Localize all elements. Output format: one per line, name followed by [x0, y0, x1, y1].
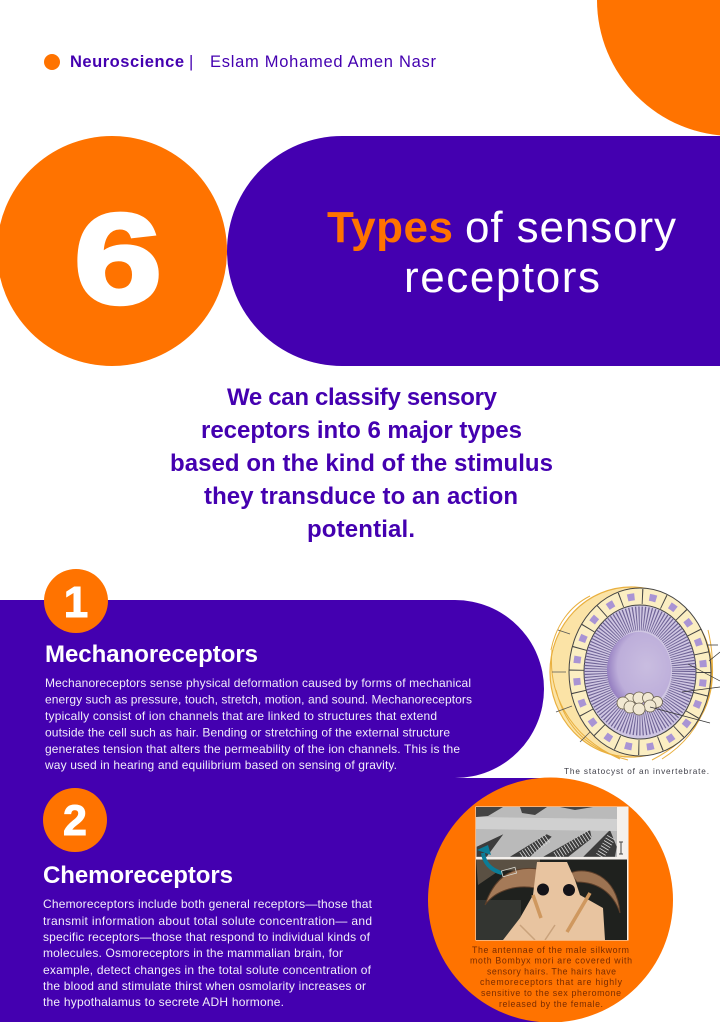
text block: mechanoreceptors description: typically consist of ion channels that are linked to structures that extend	[45, 709, 437, 723]
title banner: Types	[327, 203, 453, 252]
body	[503, 862, 605, 940]
caption: silkworm: moth Bombyx mori are covered with	[470, 956, 632, 966]
number badge 2: 2	[63, 797, 87, 845]
text block: mechanoreceptors description: Mechanoreceptors sense physical deformation caused by forms of mechanical	[45, 676, 471, 690]
header line: Neuroscience	[70, 53, 184, 71]
image: statocyst diagram	[550, 587, 720, 760]
title banner: receptors	[404, 253, 600, 302]
title banner: of sensory	[465, 203, 676, 252]
text block: chemoreceptors description: the hypothalamus to secrete ADH hormone.	[43, 995, 284, 1009]
caption: silkworm: The antennae of the male silkworm	[472, 945, 629, 955]
intro statement	[170, 384, 553, 543]
caption: silkworm: chemoreceptors that are highly	[480, 977, 623, 987]
panel: chemoreceptors text	[43, 862, 373, 1009]
text block: chemoreceptors description: Chemoreceptors include both general receptors—those that	[43, 897, 373, 911]
text block: mechanoreceptors description	[44, 676, 472, 772]
decorative corner circle	[597, 0, 720, 136]
number badge 2	[43, 788, 107, 852]
caption: statocyst: The statocyst of an invertebrate.	[564, 767, 709, 776]
intro statement: receptors into 6 major types	[201, 417, 522, 444]
number badge 1: 1	[64, 578, 88, 627]
panel: mechanoreceptors	[0, 600, 544, 778]
header line: Eslam Mohamed Amen Nasr	[210, 53, 436, 71]
header line	[44, 53, 436, 71]
text block: chemoreceptors description: molecules. Osmoreceptors in the mammalian brain, for	[43, 946, 343, 960]
panel: chemoreceptors background	[0, 778, 552, 1022]
big number 6 badge	[0, 136, 227, 366]
text block: mechanoreceptors description: energy such as pressure, touch, stretch, motion, and sound. Mechanoreceptors	[45, 692, 472, 706]
heading: chemoreceptors: Chemoreceptors	[43, 862, 233, 889]
intro statement: We can classify sensory	[227, 384, 498, 411]
text block: chemoreceptors description: example, detect changes in the total solute concentration of	[43, 963, 372, 977]
image: silkworm moth antennae	[476, 806, 628, 940]
heading: mechanoreceptors: Mechanoreceptors	[45, 641, 258, 668]
big number 6 badge: 6	[74, 188, 162, 331]
title banner	[227, 136, 720, 366]
caption: silkworm: released by the female.	[499, 999, 603, 1009]
text block: mechanoreceptors description: way used in hearing and equilibrium based on sensing of gravity.	[44, 758, 397, 772]
text block: mechanoreceptors description: generates tension that alters the permeability of the ion channels. This is the	[45, 742, 460, 756]
number badge 1	[44, 569, 108, 633]
text block: mechanoreceptors description: outside the cell such as hair. Bending or stretching of the external structure	[45, 726, 450, 740]
intro statement: based on the kind of the stimulus	[170, 450, 553, 477]
header line: |	[189, 53, 193, 71]
caption: silkworm: sensory hairs. The hairs have	[487, 966, 616, 976]
intro statement: they transduce to an action	[204, 483, 518, 510]
orange circle: silkworm figure	[428, 778, 673, 1022]
intro statement: potential.	[307, 516, 415, 543]
text block: chemoreceptors description	[43, 897, 373, 1009]
text block: chemoreceptors description: specific receptors—those that respond to individual kinds of	[43, 930, 371, 944]
caption: silkworm	[470, 945, 632, 1009]
caption: silkworm: sensitive to the sex pheromone	[481, 988, 621, 998]
text block: chemoreceptors description: the blood and stimulate thirst when osmolarity increases or	[43, 979, 366, 993]
text block: chemoreceptors description: transmit information about total solute concentration— and	[43, 914, 372, 928]
antennae	[485, 868, 543, 905]
statoliths	[617, 692, 662, 715]
